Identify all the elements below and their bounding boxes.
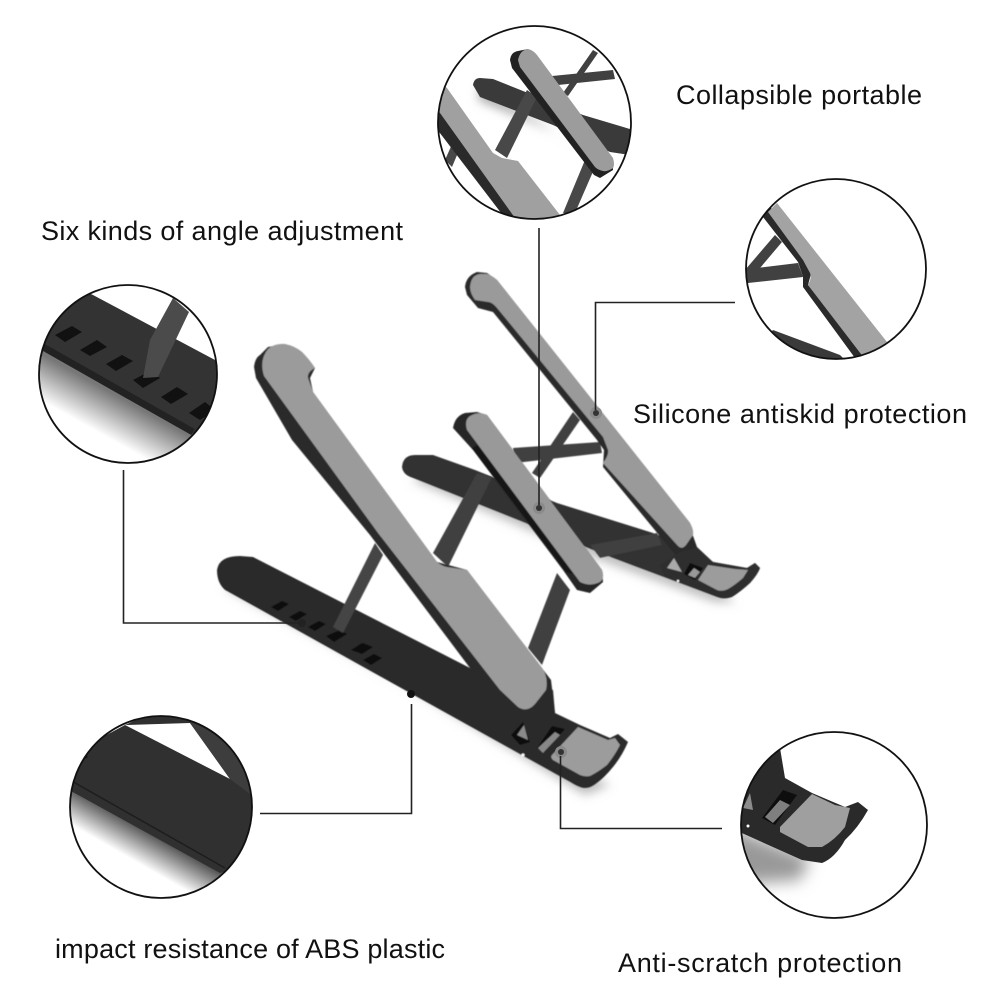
back stand cross bars bbox=[513, 412, 602, 478]
support pad bbox=[453, 412, 603, 593]
label: silicone antiskid protection: Silicone antiskid protection bbox=[633, 399, 967, 429]
callout lines bbox=[124, 228, 735, 828]
detail circle: ABS plastic bbox=[69, 715, 253, 899]
label: impact resistance of ABS plastic: impact resistance of ABS plastic bbox=[55, 934, 445, 964]
front stand shadow bbox=[225, 575, 610, 795]
label: collapsible portable: Collapsible portable bbox=[676, 80, 922, 110]
detail circle: silicone antiskid bbox=[740, 179, 926, 375]
label: anti-scratch protection: Anti-scratch protection bbox=[618, 948, 902, 978]
back laptop stand bbox=[402, 272, 760, 602]
middle support pad and legs bbox=[433, 412, 603, 665]
back stand shadow bbox=[412, 470, 735, 602]
front stand foot bbox=[511, 722, 620, 776]
back stand base plate bbox=[402, 455, 760, 598]
detail circle: collapsible bbox=[430, 26, 640, 225]
adjustment slots bbox=[271, 601, 382, 665]
front stand panel bbox=[254, 344, 555, 724]
front laptop stand bbox=[217, 344, 628, 795]
back stand lower brace bbox=[590, 533, 662, 558]
callout markers bbox=[298, 407, 602, 758]
detail circle: anti-scratch bbox=[725, 732, 927, 918]
lower support leg bbox=[528, 573, 570, 665]
detail circle: angle adjustment bbox=[38, 284, 218, 464]
back stand foot bbox=[660, 547, 760, 598]
upper support leg bbox=[433, 473, 492, 567]
label: six kinds of angle adjustment: Six kinds of angle adjustment bbox=[41, 216, 403, 246]
front stand base plate bbox=[217, 556, 628, 788]
back stand panel bbox=[465, 272, 697, 557]
front base left leg bbox=[333, 543, 383, 633]
